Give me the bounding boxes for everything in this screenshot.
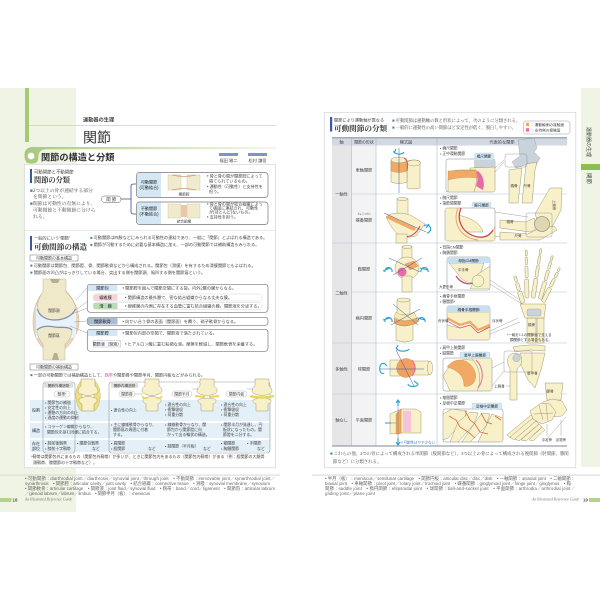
bullets: hinge joints: • 指節間関節: [440, 200, 462, 206]
page header: category and title: [29, 116, 276, 146]
left page number: [0, 498, 18, 503]
illustration: elbow: 尺骨: [514, 233, 522, 238]
detail: tarsometatarsal joint: 足根中足関節: [476, 404, 498, 409]
table: accessory structures: • 衝撃吸収: [165, 407, 183, 412]
table: classification of joints: 関節の形状: [354, 140, 374, 144]
table: accessory structures: • 顎関節: [221, 440, 235, 446]
table: classification of joints: 楕円関節: [356, 314, 372, 322]
bullets: plane joints: • 足根中足関節: [440, 400, 465, 406]
schematic: saddle joint: [383, 246, 428, 292]
panel: classification of joints: 関節腔: [179, 192, 190, 196]
right page green tab: 運動器の生理: [585, 127, 592, 157]
right page number: [583, 498, 600, 503]
panel: classification of joints: (不動結合): [139, 210, 159, 216]
table: accessory structures: 関節外構造物: [48, 383, 70, 388]
detail: humeroulnar joint: 腕尺関節: [474, 203, 489, 208]
table: accessory structures: 節包から関節腔に向: [167, 427, 202, 432]
illustration: shoulder: [494, 345, 545, 400]
bullets: hinge joints: [440, 195, 462, 206]
table: classification of joints: 球関節: [358, 366, 370, 372]
table: accessory structures: • 適合性の向上: [221, 402, 247, 407]
structure callouts: articular cartilage: 関節軟骨: [94, 318, 111, 325]
structure callouts: joint cavity and synovial fluid: 関節腔: [96, 330, 109, 337]
illustration: elbow: [500, 188, 562, 240]
bullets: pivot joints: [440, 146, 465, 156]
bullets: pivot joints: • 正中環軸関節: [440, 151, 465, 156]
left footer glossary: • 可動関節：diarthrodial joint／diarthrosis／synovial joint／through joint • 不動関節：immovable joint／synarthrodial joint／: [25, 475, 276, 482]
right panel note: [330, 450, 569, 465]
panel: classification of joints: (可動結合): [139, 184, 159, 190]
table: accessory structures: • 線維軟骨からなり、関: [165, 422, 206, 427]
detail: radiocarpal joint: 舟状骨: [438, 318, 449, 323]
table: classification of joints: 軸なし: [335, 416, 348, 424]
panel: classification of joints: を関節という。: [33, 193, 67, 200]
table: accessory structures: 関節唇: [121, 392, 133, 396]
table: accessory structures: など: [257, 446, 265, 451]
bullets: saddle joints: • 母指CM関節: [440, 244, 464, 250]
right footer glossary: biaxial joint • 車軸関節：pivot joint／rotary joint／trochoid joint • 蝶番関節：ginglymoid joint／hinge joint／ginglymus • 鞍: [325, 480, 572, 487]
table: accessory structures: 役割: [32, 406, 40, 412]
table: accessory structures: • 膝前後靱帯: [45, 440, 67, 446]
detail: radiocarpal joint: 橈骨手根関節: [457, 307, 480, 312]
illustration: forearm bones: 尺骨: [523, 183, 531, 188]
section heading bar: 関節の構造と分類: [41, 152, 115, 162]
table: accessory structures: かって出る輪状の構造。: [167, 432, 210, 437]
left page green margin: [0, 88, 76, 512]
footnote: 頭靱帯、膝関節の十字靱帯など）。: [33, 459, 97, 465]
note: ellipsoid joint: [507, 332, 552, 342]
detail: glenohumeral joint: 肩甲上腕関節: [464, 353, 486, 358]
note: ellipsoid joint: *一軸を1:1の関節面で支える: [507, 332, 552, 337]
basic structure label: [30, 255, 78, 261]
footnote: [31, 453, 264, 465]
left footer glossary: ／glenoid labrum／labrum／limbus • 関節半月（板）：meniscus: [25, 490, 151, 497]
right guide name: An Illustrated Reference Guide: [531, 498, 580, 502]
bullets: ball joints: • 股関節: [440, 350, 454, 356]
detail: thumb CMC joint: 大菱形骨: [439, 284, 453, 289]
bullets: plane joints: [440, 395, 465, 406]
table: classification of joints: 二軸性: [335, 290, 348, 296]
table: accessory structures: • 運動の方向の向上: [45, 410, 79, 415]
panel: classification of joints: れる。: [33, 214, 47, 220]
table: classification of joints: 平面関節: [356, 416, 372, 424]
panel: structure of synovial joints: ■ 可動関節は四肢などにみられる可動性の連結であり、一般に「関節」とよばれる構造である。: [90, 234, 267, 240]
table: accessory structures: 部位: [32, 445, 40, 451]
table: classification of joints: 一軸性: [335, 190, 348, 198]
page header: category and title: 運動器の生理: [83, 116, 115, 124]
detail: radiocarpal joint: [438, 306, 520, 340]
table: accessory structures: • 主に線維軟骨からなり、: [111, 422, 156, 427]
illustration: foot skeleton: 足根骨: [556, 437, 567, 442]
accessory structure intro: ■ 一部の可動関節では補助構造として、靱帯や関節唇や関節半月、関節円板などがみられる。: [30, 372, 205, 378]
table: classification of joints: 車軸関節: [356, 166, 372, 174]
structure callouts: joint capsule: • 線維膜の内側に存在する血管に富む結合組織の膜。関節液を分泌する。: [125, 302, 262, 310]
table: accessory structures: 構造: [32, 427, 40, 433]
table: accessory structures: • 胸鎖関節: [221, 446, 239, 451]
structure callouts: articular cartilage: • 向かい合う骨の表面（関節面）を覆う、硝子軟骨からなる。: [122, 318, 238, 325]
panel: classification of joints: 隔てられているもの。: [209, 178, 250, 184]
section heading bar: 福田 雅二: [220, 157, 237, 164]
panel: classification of joints: 関節の分類: [34, 176, 71, 184]
detail: thumb CMC joint: [439, 257, 522, 304]
table: accessory structures: • 安定性の向上: [45, 405, 71, 410]
table: accessory structures: 関節円板: [229, 392, 244, 396]
left chapter tab strip: [25, 88, 29, 142]
schematic: ball joint: [380, 345, 432, 386]
panel: classification of joints: [30, 168, 268, 224]
illustration: forearm bones: 橈骨: [510, 183, 518, 188]
table: accessory structures: • 衝撃吸収: [221, 407, 239, 412]
illustration: foot skeleton: [507, 383, 567, 442]
table: accessory structures: • 関節包の補強: [45, 400, 71, 405]
table: accessory structures: • 膝関節（半月板）: [165, 444, 199, 448]
right footer glossary: • 半月（板）：meniscus／semilunar cartilage • 関節円板：articular disc／disc／disk • 一軸関節：uniaxial joint • 二軸関節：: [325, 475, 575, 482]
panel: classification of joints: 可動関節と不動関節に分けら: [33, 206, 96, 214]
right footer glossary: 関節：saddle joint • 楕円関節：ellipsoidal joint • 球関節：ball-and-socket joint • 平面関節：arthrodia／arthrodial joint／: [325, 485, 576, 492]
panel: structure of synovial joints: [30, 234, 267, 252]
left footer glossary: [25, 475, 276, 497]
note: low mobility: ※可動性はやや少ない: [400, 440, 435, 444]
detail: tarsometatarsal joint: [443, 403, 503, 442]
right panel heading: [330, 116, 520, 133]
panel: classification of joints: 可動関節: [141, 178, 157, 184]
panel: classification of joints: ■関節は可動性の有無により、: [30, 200, 95, 207]
bullets: ball joints: • 肩甲上腕関節: [440, 345, 465, 350]
table: accessory structures: [30, 382, 270, 453]
table: accessory structures: • 股関節: [111, 446, 125, 451]
table: accessory structures: など: [92, 446, 100, 451]
right footer glossary: [325, 475, 576, 496]
left footer glossary: synarthrosis • 関節腔：articular cavity／joint cavity • 結合組織：connective tissue • 滑膜：synovial membrane／synovium: [25, 480, 270, 487]
left guide name: An Illustrated Reference Guide: [24, 498, 73, 502]
table: accessory structures: 節腔を二分する。: [223, 432, 254, 437]
schematic: plane joint: [385, 400, 421, 445]
right panel heading: ■ 一般的に運動性の高い関節ほど安定性が低く、脱臼しやすい。: [392, 124, 516, 131]
table: accessory structures: 存在: [32, 440, 40, 446]
table: accessory structures: • 関節包靱帯: [77, 440, 99, 446]
panel: classification of joints: • 支持性を担う。: [207, 214, 238, 220]
panel: classification of joints: が(ほとんど)ないもの。: [209, 209, 253, 215]
basic structure text: [30, 262, 256, 276]
left page number: 18: [12, 498, 18, 503]
right panel note: ■ これらの他、2つの骨によって構成される単関節（股関節など）、3つ以上の骨によって構成される複関節（肘関節、膝関: [330, 450, 569, 457]
panel: structure of synovial joints: ■ 関節が可動するために必要な基本構造に加え、一部の可動関節では補助構造もみられる。: [90, 241, 259, 247]
table: accessory structures: など: [203, 446, 211, 451]
structure callouts: joint capsule: • 関節構造の最外層で、密な結合組織からなる丈夫な膜。: [125, 294, 232, 301]
basic structure label: 可動関節の基本構造: [36, 255, 72, 261]
panel: classification of joints: • 骨と骨の間が結合組織によっ: [207, 200, 263, 206]
table: classification of joints: 多軸性: [335, 366, 348, 372]
illustration: hand skeleton: [513, 248, 561, 343]
table: accessory structures: 関節半月: [174, 392, 190, 396]
section heading bar: 松村 謙信: [249, 157, 267, 164]
panel: classification of joints: 不動関節: [141, 205, 157, 211]
structure callouts: joint capsule: 関節包: [96, 285, 109, 292]
legend: [524, 121, 570, 134]
structure callouts: joint capsule: 滑 膜: [99, 302, 112, 310]
icon: labrum joint: [135, 379, 162, 411]
accessory structure label: 可動関節の補助構造: [36, 364, 72, 370]
structure callouts: joint cavity and synovial fluid: 関節液（滑液）: [93, 340, 121, 346]
detail: radiocarpal joint: 月状骨: [492, 318, 503, 323]
bullets: ball joints: [440, 345, 465, 356]
table: accessory structures: する。: [113, 432, 125, 437]
page header: category and title: 関節: [83, 130, 111, 146]
right page main card: [324, 112, 576, 468]
panel: classification of joints: て強固に連結され、可動性: [209, 204, 258, 210]
table: classification of joints: 模式図: [400, 138, 412, 146]
bullets: saddle joints: • 胸鎖関節: [440, 250, 458, 255]
table: accessory structures: など: [148, 446, 156, 451]
table: accessory structures: • 適合性の向上: [165, 402, 191, 407]
schematic: pivot joint: [391, 148, 420, 193]
structure callouts: joint cavity and synovial fluid: • ヒアルロン酸に富む粘稠な液。摩擦を軽減し、関節軟骨を栄養する。: [125, 340, 257, 347]
table: accessory structures: • 手関節: [247, 440, 261, 446]
panel: structure of synovial joints: 可動関節の構造: [34, 242, 88, 252]
right page number: 19: [583, 498, 588, 503]
illustration: foot skeleton: 脛骨: [546, 388, 554, 394]
left page main card: [24, 164, 275, 468]
anatomy illustration: knee-type joint: 関節窩: [48, 333, 60, 338]
illustration: hand skeleton: 橈骨: [528, 322, 536, 327]
illustration: foot skeleton: 中足骨: [542, 437, 553, 442]
table: classification of joints: 蝶番関節: [356, 216, 372, 224]
table: accessory structures: • 肩関節: [111, 440, 125, 446]
left footer glossary: • 関節軟骨：articular cartilage • 関節液：joint fluid／synovial fluid • 靱帯：band／cord／ligament • 関節唇：articular labrum: [25, 485, 275, 492]
table: accessory structures: 関節包を挟む同様に結合する。: [47, 430, 101, 434]
basic structure text: ■ 可動関節は関節包、関節腔、骨、関節軟骨などから構成される。関節包（滑膜）を有するため滑膜関節ともよばれる。: [30, 262, 256, 269]
table: classification of joints: 軸: [339, 138, 344, 146]
panel: classification of joints: 担う。: [209, 188, 221, 194]
bullets: ellipsoid joints: • 橈骨手根関節: [440, 294, 465, 298]
illustration: shoulder: 肩甲骨: [527, 370, 538, 376]
right panel note: 節など）に分類される。: [333, 458, 381, 465]
table: classification of joints: 代表的な関節: [489, 138, 515, 146]
bullets: saddle joints: [440, 244, 464, 255]
right page green tab: [581, 88, 600, 467]
bullets: hinge joints: • 腕尺関節: [440, 195, 458, 200]
anatomy illustration: knee-type joint: [33, 279, 93, 360]
structure callouts: joint cavity and synovial fluid: [87, 329, 268, 351]
left footer rule: [0, 474, 280, 476]
table: accessory structures: • 過度の運動の抑制: [45, 415, 79, 420]
icon: articular disc joint: [247, 379, 274, 411]
legend: ：支持側の接触面: [531, 128, 561, 132]
table: classification of joints: [332, 137, 567, 447]
section heading bar: [24, 147, 276, 164]
table: classification of joints: ちょうつがい: [357, 212, 371, 216]
icon: ligament joint: [76, 379, 100, 411]
detail: glenohumeral joint: [443, 352, 504, 391]
panel: classification of joints: 結合組織: [177, 218, 192, 224]
basic structure text: ■ 関節面の凹凸がはっきりしている場合、突出する側を関節頭、陥凹する側を関節窩という。: [30, 269, 205, 276]
panel: classification of joints: 関 節: [106, 196, 117, 203]
table: accessory structures: 靱帯*: [57, 392, 67, 396]
structure callouts: articular cartilage: [87, 317, 268, 325]
detail: radioulnar joint: [446, 153, 504, 192]
right footer glossary: gliding joint／plane joint: [325, 491, 376, 496]
right panel heading: 関節により運動軸が異なる: [334, 116, 384, 124]
right panel heading: ■ 可動関節は運動軸の数と形状によって、次のように分類される。: [392, 117, 520, 124]
detail: humeroulnar joint: [441, 202, 528, 241]
structure callouts: joint cavity and synovial fluid: • 関節包内部の空間で、関節液で満たされている。: [122, 330, 217, 337]
right page green tab: 関節: [585, 173, 593, 185]
right panel heading: 可動関節の分類: [334, 123, 388, 133]
detail: radioulnar joint: 橈尺関節: [477, 154, 492, 159]
divider: [25, 229, 275, 232]
illustration: elbow: 上腕骨: [552, 200, 557, 211]
table: accessory structures: 関節窩の周囲に付着: [113, 427, 148, 432]
footnote: *靱帯は関節包外にあるもの（関節包外靱帯）が多いが、ときに関節包内をあるもの（関節包内靱帯）がある（例：股関節の大腿骨: [31, 453, 264, 459]
detail: thumb CMC joint: 母指CM関節: [458, 258, 479, 263]
illustration: forearm bones: [505, 138, 540, 203]
table: accessory structures: 板状になったもの。関: [223, 427, 262, 432]
table: accessory structures: 関節内構造物: [114, 383, 136, 388]
structure callouts: joint capsule: 線維膜: [99, 294, 112, 301]
table: accessory structures: • 関節半月が発達し、円: [221, 422, 262, 427]
legend: ：運動軸側の接触面: [531, 122, 564, 127]
anatomy illustration: knee-type joint: 関節頭: [48, 308, 60, 313]
panel: classification of joints: • 運動性（可動性）と支持性を: [207, 183, 263, 189]
bullets: ellipsoid joints: [440, 294, 465, 304]
detail: thumb CMC joint: 中手骨: [458, 267, 469, 272]
panel: classification of joints: ■2つ以上の骨が連結する部分: [30, 187, 93, 194]
icon: meniscus joint: [192, 379, 219, 411]
accessory structure label: [30, 364, 78, 370]
panel: structure of synovial joints: 一般的にいう“関節”: [34, 234, 71, 242]
schematic: ellipsoid joint: [383, 298, 425, 342]
table: accessory structures: • 荷重分散: [165, 412, 183, 417]
structure callouts: joint capsule: [87, 284, 268, 312]
table: accessory structures: • コラーゲン線維からなり、: [45, 424, 94, 429]
table: accessory structures: • 荷重分散: [221, 412, 239, 417]
bullets: ellipsoid joints: • 顎関節*: [440, 299, 456, 304]
table: classification of joints: 鞍関節: [358, 266, 370, 272]
illustration: shoulder: 上腕骨: [494, 384, 505, 388]
table: accessory structures: • 適合性の向上: [111, 408, 137, 412]
bullets: plane joints: • 椎間関節: [440, 395, 458, 400]
note: ellipsoid joint: 顆関節とする場合もある。: [510, 337, 552, 342]
illustration: elbow: 橈骨: [506, 219, 514, 224]
structure callouts: joint capsule: • 関節腔を囲んで関節空間にする袋。内外2層の膜からなる。: [122, 285, 236, 292]
panel: classification of joints: 可動関節と不動関節: [34, 168, 74, 176]
schematic: hinge joint: [384, 198, 431, 243]
table: accessory structures: • 膝前十字靱帯: [45, 446, 71, 451]
panel: classification of joints: • 骨と骨の間が関節腔によって: [207, 172, 262, 178]
bullets: pivot joints: • 橈尺関節: [440, 146, 458, 150]
right footer rule: [312, 474, 600, 476]
